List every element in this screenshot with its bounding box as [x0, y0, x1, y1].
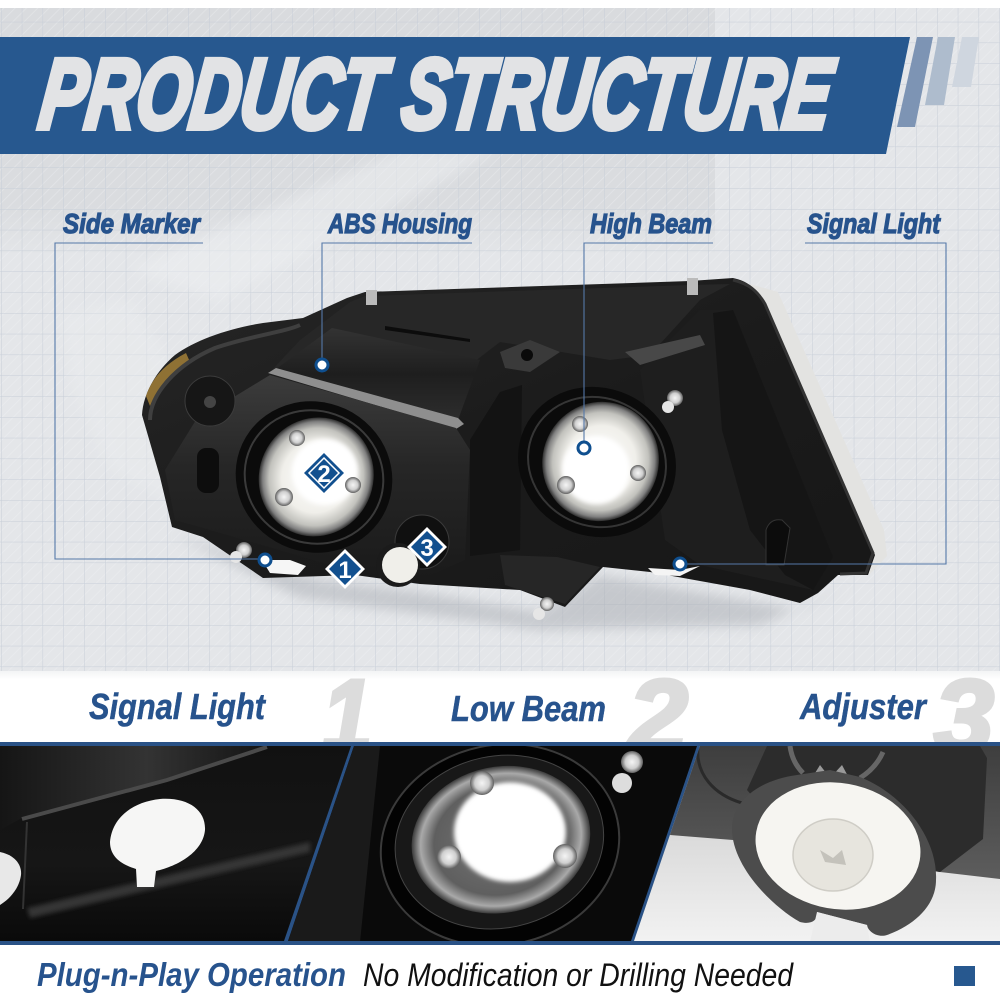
lower block face — [165, 375, 470, 580]
curved recess — [698, 746, 742, 803]
central cavity — [470, 385, 522, 556]
side plug — [197, 448, 219, 493]
right panel — [640, 310, 833, 590]
banner accent stripes — [897, 37, 979, 127]
diamond badge 2 — [304, 453, 344, 493]
lower ridge glow — [27, 842, 310, 918]
top prongs — [790, 746, 883, 778]
grey backdrop — [670, 746, 1000, 879]
footer — [0, 945, 1000, 1000]
diamond badge 3 — [407, 527, 447, 567]
headlight assembly — [142, 278, 887, 620]
callout label: High Beam: High Beam — [590, 208, 712, 239]
round knob — [185, 376, 235, 426]
leader line: High Beam — [584, 243, 713, 448]
footer description: No Modification or Drilling Needed — [363, 957, 794, 993]
signal bulb opening — [648, 566, 700, 576]
side rim highlight — [150, 325, 300, 420]
high beam bolts — [557, 416, 646, 494]
outer rim — [733, 280, 873, 574]
ghost numerals: 3 — [934, 659, 994, 775]
callout label: ABS Housing: ABS Housing — [327, 208, 472, 239]
lens bolts — [470, 771, 494, 795]
housing body — [142, 278, 875, 607]
fold edge highlight — [22, 747, 267, 819]
callout label: Signal Light: Signal Light — [807, 208, 941, 239]
white bulb cap — [110, 799, 205, 887]
photo strip frame — [0, 742, 1000, 945]
horseshoe socket — [732, 770, 936, 936]
diamond badge 3: 3 — [420, 535, 434, 562]
right ridge — [625, 335, 705, 365]
amber side marker lens — [146, 353, 190, 406]
low beam bolts — [275, 430, 361, 506]
footer square — [954, 966, 975, 986]
marker dot: Side Marker — [259, 554, 271, 566]
top clips — [366, 290, 377, 305]
screw head — [793, 819, 873, 891]
floor gap under socket — [815, 912, 868, 927]
bottom bracket — [500, 555, 600, 604]
feature heading band — [0, 671, 1000, 742]
mounting tab — [500, 340, 560, 372]
leader line: Signal Light — [680, 243, 946, 564]
headlight shadow — [175, 535, 850, 630]
low beam ring — [211, 376, 417, 578]
adjuster socket — [395, 515, 449, 569]
photo panel 1: signal light — [0, 746, 360, 942]
side marker bulb opening — [262, 560, 306, 575]
right panel dark inset — [713, 310, 833, 590]
marker dot: Signal Light — [674, 558, 686, 570]
dark rear housing — [747, 746, 987, 872]
background wall above fold — [20, 746, 247, 812]
stud — [621, 751, 643, 773]
white adjuster disc — [756, 782, 920, 910]
photo panel 3: adjuster — [630, 746, 1000, 942]
ghost numerals: 1 — [322, 659, 372, 775]
right plug — [766, 520, 790, 565]
diamond badge 2: 2 — [317, 461, 331, 488]
flange slot — [385, 326, 470, 342]
marker dot: ABS Housing — [316, 359, 328, 371]
ghost numerals: 2 — [626, 659, 688, 775]
clear lens edge — [750, 284, 887, 574]
neighbouring bulb — [0, 852, 21, 905]
studs — [230, 390, 683, 620]
marker dot: High Beam — [578, 442, 590, 454]
diamond badge 1: 1 — [338, 557, 352, 584]
ghost numerals — [323, 678, 995, 742]
heading: Signal Light: Signal Light — [89, 686, 267, 727]
high beam ring — [493, 361, 701, 563]
heading: Low Beam: Low Beam — [451, 688, 606, 729]
heading: Adjuster: Adjuster — [799, 686, 928, 727]
photo panel 2: low beam — [288, 746, 697, 941]
diamond badge 1 — [325, 549, 365, 589]
callout label: Side Marker: Side Marker — [63, 208, 202, 239]
leader line: ABS Housing — [322, 243, 472, 365]
footer highlight text: Plug-n-Play Operation — [37, 956, 346, 993]
upper face — [272, 328, 480, 420]
top flange — [270, 284, 730, 372]
title banner — [0, 37, 910, 154]
adjuster head — [376, 543, 420, 587]
page background: blueprint grid — [0, 0, 1000, 672]
main lit ridge — [268, 368, 464, 429]
leader line: Side Marker — [55, 243, 265, 559]
